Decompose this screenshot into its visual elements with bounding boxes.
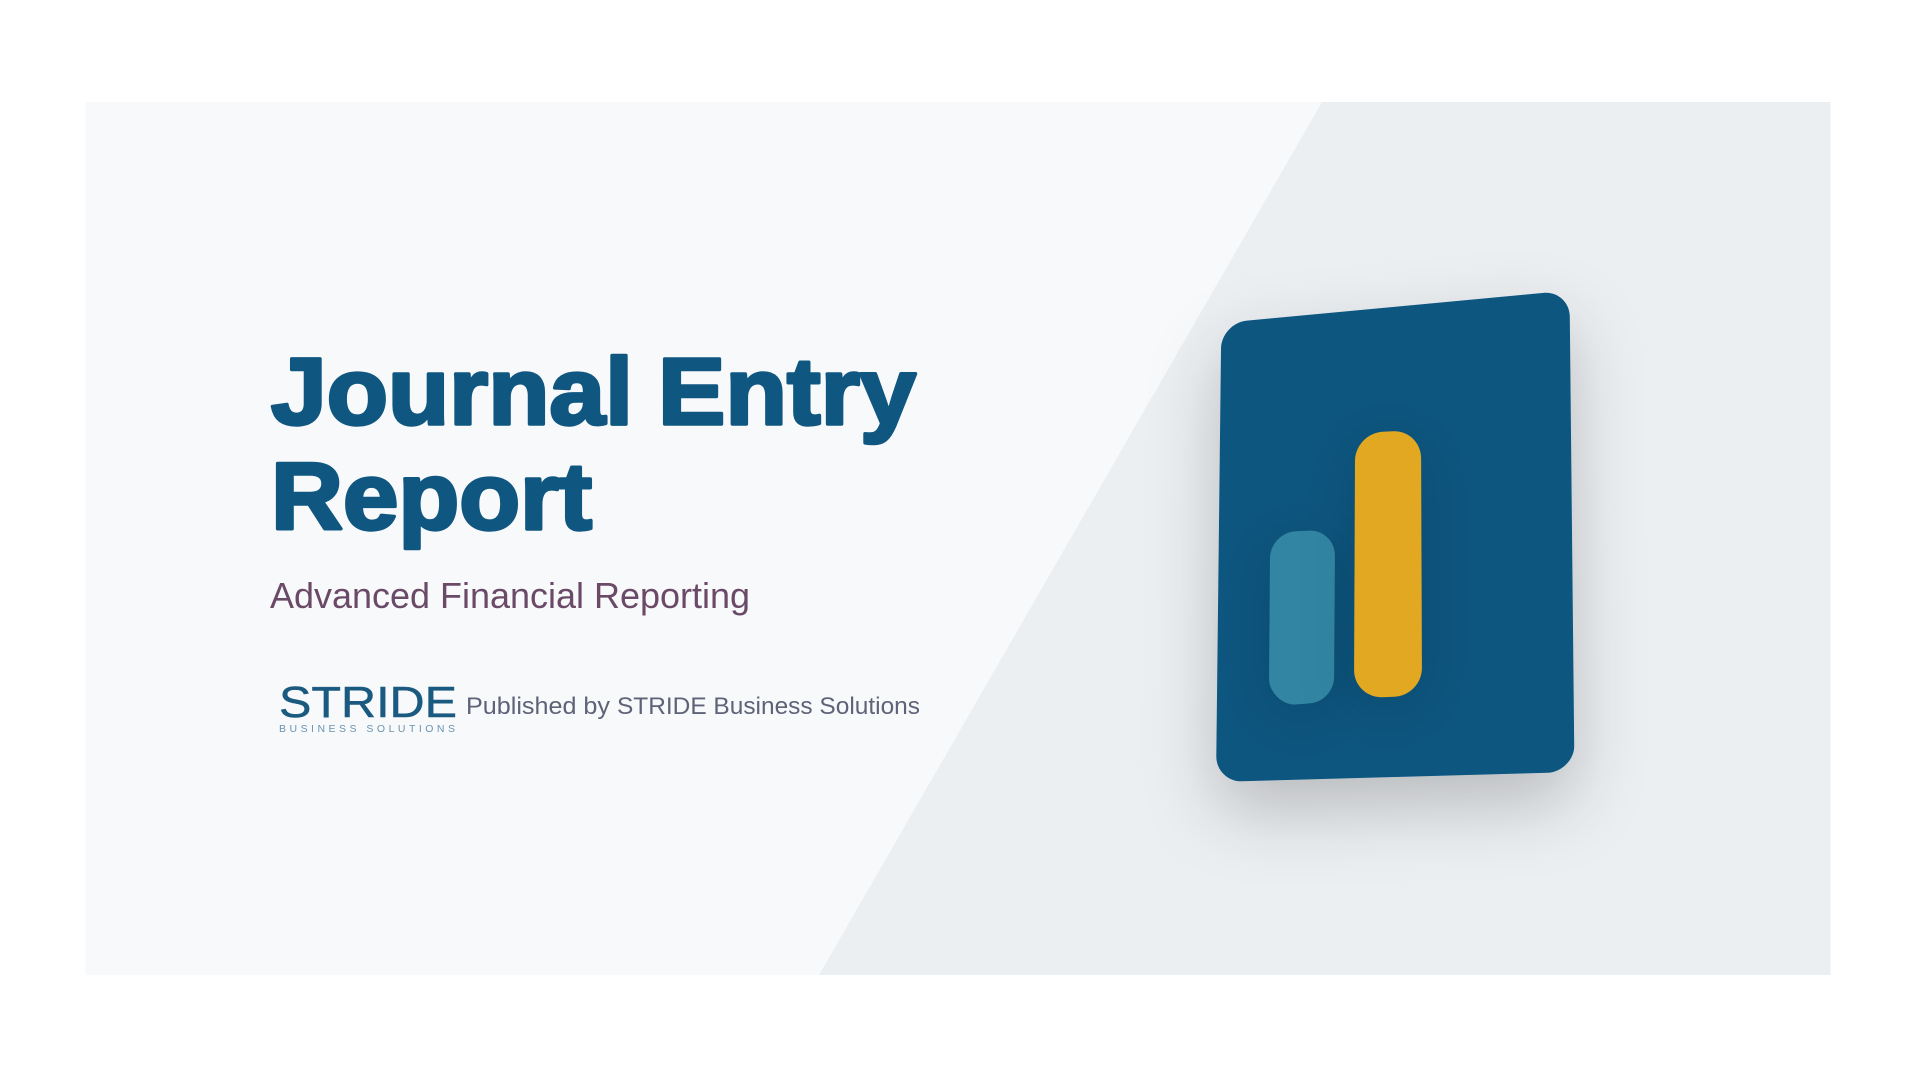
icon: tilted bar chart card xyxy=(1216,293,1574,781)
text block: title: Entry xyxy=(658,339,916,445)
text block: title: Journal xyxy=(271,339,633,445)
card xyxy=(1216,293,1574,781)
logo: STRIDE Business Solutions: STRIDE xyxy=(279,678,457,727)
logo: STRIDE Business Solutions: BUSINESS SOLUTIONS xyxy=(279,723,455,735)
text block: subtitle: Advanced Financial Reporting xyxy=(270,575,750,616)
text block: title: Report xyxy=(271,444,592,550)
panel: background xyxy=(86,102,1830,975)
text block: title xyxy=(271,339,916,550)
text block: publisher line: STRIDE Business Solutions xyxy=(617,693,920,720)
bar: teal xyxy=(1269,531,1335,705)
text block: publisher line: Published by xyxy=(466,693,610,720)
text block: publisher line xyxy=(466,693,920,720)
panel: diagonal right shade xyxy=(819,102,1830,975)
bar: yellow xyxy=(1354,431,1422,697)
